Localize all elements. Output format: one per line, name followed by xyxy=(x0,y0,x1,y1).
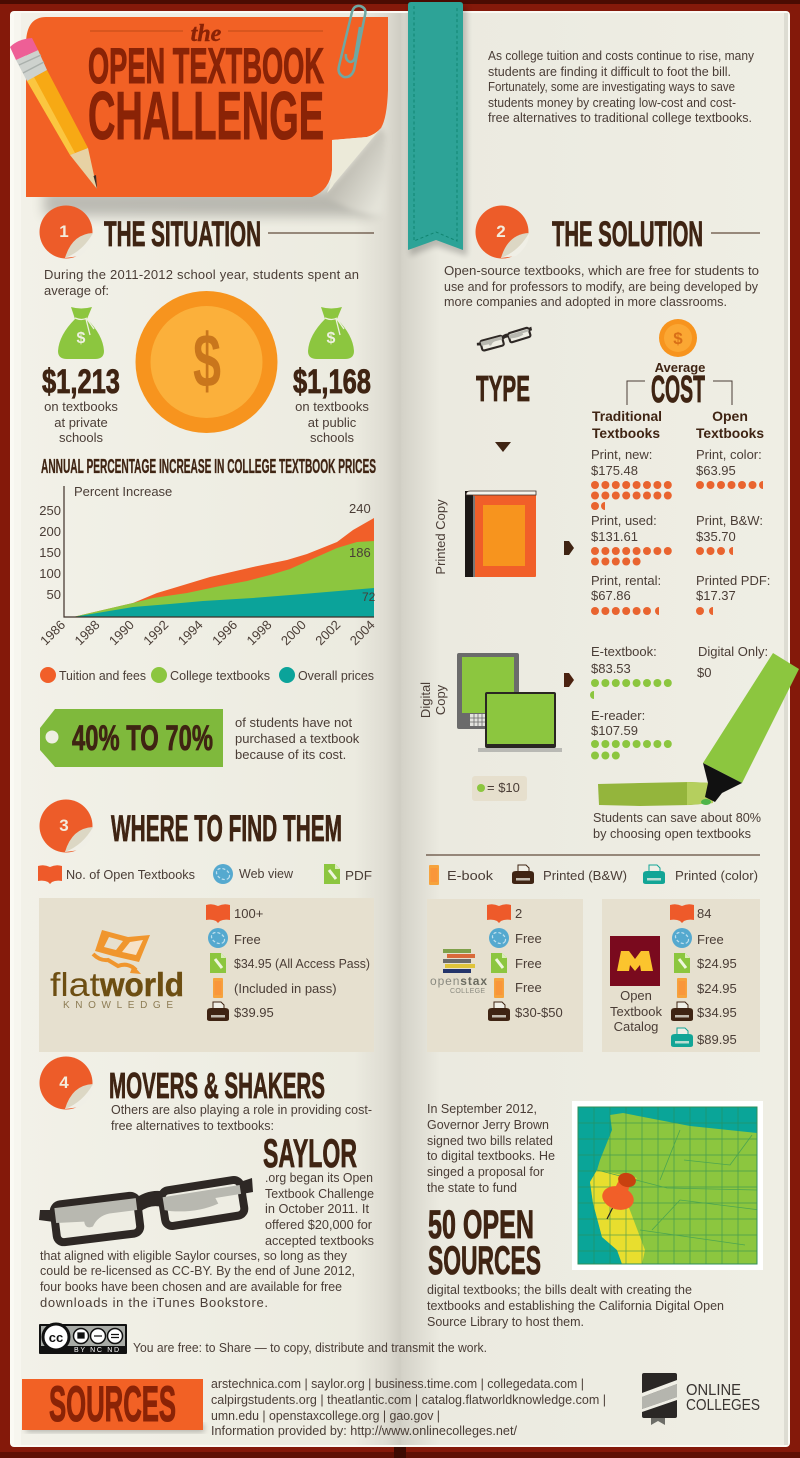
cost: print used: Print, used: xyxy=(591,513,657,528)
area chart: 186 xyxy=(349,545,371,560)
california bills text continued: textbooks and establishing the California Digital Open xyxy=(427,1298,724,1313)
heading: 50 open sources: 50 OPEN xyxy=(428,1203,534,1247)
california bills text continued: Source Library to host them. xyxy=(427,1314,584,1329)
panel: flat world knowledge: Free xyxy=(234,932,261,947)
saylor text xyxy=(40,1170,374,1310)
flat world logo: world xyxy=(99,966,184,1003)
dot legend xyxy=(472,776,527,801)
movers intro text xyxy=(111,1102,372,1133)
area chart: Percent Increase xyxy=(74,484,172,499)
dot legend: = $10 xyxy=(487,780,520,795)
callout text xyxy=(235,715,360,762)
panel: open textbook catalog: $24.95 xyxy=(697,981,737,996)
california bills text: to digital textbooks. He xyxy=(427,1148,555,1163)
openstax logo: COLLEGE xyxy=(450,988,485,995)
saylor text: four books have been chosen and are available for free xyxy=(40,1279,342,1294)
cost: digital only xyxy=(697,644,768,680)
online colleges logo: ONLINE xyxy=(686,1382,741,1399)
area chart: 200 xyxy=(39,524,61,539)
california bills text: Governor Jerry Brown xyxy=(427,1117,549,1132)
stat: private schools xyxy=(42,307,120,445)
icon: tablet and laptop xyxy=(457,653,562,752)
stat: public schools: schools xyxy=(310,430,355,445)
digital copy label: Copy xyxy=(433,684,448,715)
cost: print color xyxy=(696,447,763,489)
format key left xyxy=(38,864,372,884)
intro paragraph: Fortunately, some are investigating ways to save xyxy=(488,80,735,94)
saylor text: could be re-licensed as CC-BY. By the end of June 2012, xyxy=(40,1263,355,1278)
price tag callout: 40% TO 70% xyxy=(72,719,213,758)
panel: open textbook catalog: $34.95 xyxy=(697,1005,737,1020)
bookmark ribbon xyxy=(408,2,467,256)
cost: print used xyxy=(591,513,672,566)
flat world logo: KNOWLEDGE xyxy=(63,1000,173,1011)
panel: open textbook catalog: $24.95 xyxy=(697,956,737,971)
savings note: by choosing open textbooks xyxy=(593,826,751,841)
title text: CHALLENGE xyxy=(88,78,324,154)
sources banner: SOURCES xyxy=(49,1376,176,1432)
title text: OPEN TEXTBOOK xyxy=(88,38,324,94)
sources banner xyxy=(22,1376,204,1432)
area chart: 1986 xyxy=(37,617,68,648)
area chart: 1994 xyxy=(175,617,206,648)
section 1 heading: the situation: THE SITUATION xyxy=(104,215,261,254)
california bills text: In September 2012, xyxy=(427,1101,537,1116)
panel: open textbook catalog: Textbook xyxy=(610,1004,663,1019)
area chart: 150 xyxy=(39,545,61,560)
situation intro text xyxy=(44,267,359,298)
format key right: Printed (color) xyxy=(675,868,758,883)
panel: open textbook catalog: 84 xyxy=(697,906,711,921)
panel: open textbook catalog: Free xyxy=(697,932,724,947)
area chart: 1998 xyxy=(244,617,275,648)
california bills text continued xyxy=(427,1282,724,1329)
section 3 heading: where to find them: 3 xyxy=(59,816,69,835)
format key right: Printed (B&W) xyxy=(543,868,627,883)
cost heading: $ xyxy=(673,329,683,348)
movers intro text: Others are also playing a role in providing cost- xyxy=(111,1102,372,1117)
section 1 heading: the situation: 1 xyxy=(59,222,69,241)
section 3 heading: where to find them xyxy=(40,800,342,852)
icon: large glasses xyxy=(39,1178,253,1243)
saylor text: offered $20,000 for xyxy=(265,1217,373,1232)
solution intro text: more companies and adopted in more classrooms. xyxy=(444,294,727,309)
heading: 50 open sources xyxy=(428,1203,541,1283)
california bills text: the state to fund xyxy=(427,1180,517,1195)
saylor text: downloads in the iTunes Bookstore. xyxy=(40,1295,268,1310)
online colleges logo: COLLEGES xyxy=(686,1397,760,1414)
chart title: ANNUAL PERCENTAGE INCREASE IN COLLEGE TEXTBOOK PRICES xyxy=(41,456,376,478)
area chart: 100 xyxy=(39,566,61,581)
license text: You are free: to Share — to copy, distribute and transmit the work. xyxy=(133,1340,487,1355)
title text xyxy=(88,21,324,154)
intro paragraph: students money by creating low-cost and cost- xyxy=(488,96,736,110)
cost: printed pdf: Printed PDF: xyxy=(696,573,770,588)
cost heading: Average xyxy=(655,360,705,375)
section 2 heading: the solution: 2 xyxy=(496,222,506,241)
cost: e-textbook: $83.53 xyxy=(591,661,631,676)
california bills text xyxy=(427,1101,555,1195)
title text: the xyxy=(191,21,222,47)
arrow: down xyxy=(495,442,511,452)
printed copy label: Printed Copy xyxy=(433,499,448,575)
intro paragraph: As college tuition and costs continue to rise, many xyxy=(488,49,755,63)
cost heading: Open xyxy=(712,408,748,424)
intro paragraph: students are finding it difficult to foot the bill. xyxy=(488,65,731,79)
cost heading: Traditional xyxy=(592,408,662,424)
arrow: printed xyxy=(564,541,574,555)
cost: print new xyxy=(591,447,672,510)
solution intro text xyxy=(444,263,759,309)
map of california xyxy=(572,1101,763,1270)
cost: e-reader: $107.59 xyxy=(591,723,638,738)
section 4 heading: movers and shakers xyxy=(40,1056,325,1110)
stat: private schools: $1,213 xyxy=(42,363,120,401)
cost: print new: $175.48 xyxy=(591,463,638,478)
format key left: PDF xyxy=(345,868,372,883)
cost: e-reader xyxy=(591,708,672,760)
stat: private schools: schools xyxy=(59,430,104,445)
arrow: digital xyxy=(564,673,574,687)
area chart: 72 xyxy=(362,590,376,604)
area chart: 1996 xyxy=(209,617,240,648)
saylor text: in October 2011. It xyxy=(265,1201,369,1216)
cost: printed pdf: $17.37 xyxy=(696,588,736,603)
saylor text: accepted textbooks xyxy=(265,1233,374,1248)
icon: paperclip xyxy=(339,6,365,77)
area chart xyxy=(37,484,378,648)
cost: print b&w: $35.70 xyxy=(696,529,736,544)
price tag callout xyxy=(40,709,223,767)
cost: print rental xyxy=(591,573,661,615)
intro paragraph: free alternatives to traditional college textbooks. xyxy=(488,111,752,125)
california bills text: signed two bills related xyxy=(427,1133,553,1148)
sources list: arstechnica.com | saylor.org | business.time.com | collegedata.com | xyxy=(211,1376,584,1391)
saylor text: .org began its Open xyxy=(265,1170,373,1185)
saylor text: Textbook Challenge xyxy=(265,1186,374,1201)
type heading: TYPE xyxy=(476,368,530,409)
format key right: E-book xyxy=(447,868,494,883)
cost heading: Textbooks xyxy=(696,425,764,441)
online colleges logo xyxy=(642,1373,760,1425)
digital copy label: Digital xyxy=(418,682,433,718)
panel: flat world knowledge xyxy=(39,898,374,1052)
chart legend: Overall prices xyxy=(298,668,374,683)
cost: print color: $63.95 xyxy=(696,463,736,478)
chart legend: Tuition and fees xyxy=(59,668,146,683)
saylor text: that aligned with eligible Saylor courses, so long as they xyxy=(40,1248,347,1263)
chart legend xyxy=(40,667,374,683)
situation intro text: During the 2011-2012 school year, students spent an xyxy=(44,267,359,282)
flat world logo: flat xyxy=(50,966,100,1003)
panel: open textbook catalog: Catalog xyxy=(614,1019,658,1034)
panel: openstax college xyxy=(427,899,583,1052)
cost: digital only: Digital Only: xyxy=(698,644,768,659)
openstax logo xyxy=(430,949,487,995)
sources list: Information provided by: http://www.onlinecolleges.net/ xyxy=(211,1423,517,1438)
stat: public schools: on textbooks xyxy=(295,399,369,414)
chart legend: College textbooks xyxy=(170,668,270,683)
panel: openstax college: $30-$50 xyxy=(515,1005,563,1020)
cost: print b&w xyxy=(696,513,763,555)
cost heading: Textbooks xyxy=(592,425,660,441)
heading: 50 open sources: SOURCES xyxy=(428,1239,541,1283)
cost: e-textbook: E-textbook: xyxy=(591,644,657,659)
section 4 heading: movers and shakers: MOVERS & SHAKERS xyxy=(109,1065,325,1106)
openstax logo: openstax xyxy=(430,974,487,988)
panel: openstax college: 2 xyxy=(515,906,522,921)
stat: private schools: at private xyxy=(54,415,108,430)
cost: print rental: $67.86 xyxy=(591,588,631,603)
panel: openstax college: Free xyxy=(515,980,542,995)
panel: open textbook catalog xyxy=(602,899,760,1052)
cost: print color: Print, color: xyxy=(696,447,762,462)
cost: e-textbook xyxy=(590,644,672,699)
area chart: 1990 xyxy=(106,617,137,648)
savings note: Students can save about 80% xyxy=(593,810,761,825)
area chart: 2002 xyxy=(312,617,343,648)
cost: digital only: $0 xyxy=(697,665,711,680)
digital copy label xyxy=(418,682,448,718)
cost: e-reader: E-reader: xyxy=(591,708,645,723)
section 3 heading: where to find them: WHERE TO FIND THEM xyxy=(111,808,342,849)
cost: printed pdf xyxy=(696,573,770,615)
panel: openstax college: Free xyxy=(515,931,542,946)
section 1 heading: the situation xyxy=(40,206,374,258)
title banner xyxy=(26,17,388,216)
solution intro text: use and for professors to modify, are being developed by xyxy=(444,279,758,294)
flat world logo xyxy=(50,930,184,1011)
cost heading: COST xyxy=(651,369,705,411)
area chart: 50 xyxy=(47,587,61,602)
university of minnesota logo xyxy=(610,936,660,986)
icon: printed book xyxy=(465,491,536,577)
section 4 heading: movers and shakers: 4 xyxy=(59,1073,69,1092)
cost: print used: $131.61 xyxy=(591,529,638,544)
savings note xyxy=(593,810,761,841)
creative commons badge xyxy=(39,1324,127,1354)
creative commons badge: BY NC ND xyxy=(74,1347,119,1354)
panel: flat world knowledge: $34.95 (All Access Pass) xyxy=(234,956,370,971)
panel: flat world knowledge: 100+ xyxy=(234,906,263,921)
panel: openstax college: Free xyxy=(515,956,542,971)
map pin xyxy=(600,1171,638,1219)
area chart: 2004 xyxy=(347,617,378,648)
cost: print b&w: Print, B&W: xyxy=(696,513,763,528)
callout text: of students have not xyxy=(235,715,352,730)
stat: public schools: $1,168 xyxy=(293,363,371,401)
callout text: because of its cost. xyxy=(235,747,346,762)
intro paragraph xyxy=(488,49,755,125)
format key right xyxy=(429,865,758,885)
saylor heading: SAYLOR xyxy=(263,1132,357,1176)
stat: public schools xyxy=(293,307,371,445)
cost: print new: Print, new: xyxy=(591,447,652,462)
creative commons badge: cc xyxy=(49,1330,63,1345)
icon: small glasses xyxy=(475,327,534,352)
format key left: Web view xyxy=(239,866,294,881)
icon: large dollar coin: $ xyxy=(193,319,221,404)
icon: pencil xyxy=(10,38,97,189)
panel: open textbook catalog: Open xyxy=(620,988,652,1003)
callout text: purchased a textbook xyxy=(235,731,360,746)
icon: highlighter xyxy=(598,653,799,806)
california bills text: singed a proposal for xyxy=(427,1164,545,1179)
california bills text continued: digital textbooks; the bills dealt with creating the xyxy=(427,1282,692,1297)
area chart: 2000 xyxy=(278,617,309,648)
cost: print rental: Print, rental: xyxy=(591,573,661,588)
sources list: umn.edu | openstaxcollege.org | gao.gov | xyxy=(211,1408,440,1423)
situation intro text: average of: xyxy=(44,283,109,298)
stat: public schools: at public xyxy=(308,415,357,430)
format key left: No. of Open Textbooks xyxy=(66,867,195,882)
sources list xyxy=(211,1376,606,1438)
solution intro text: Open-source textbooks, which are free for students to xyxy=(444,263,759,278)
panel: flat world knowledge: (Included in pass) xyxy=(234,981,337,996)
panel: flat world knowledge: $39.95 xyxy=(234,1005,274,1020)
area chart: 250 xyxy=(39,503,61,518)
movers intro text: free alternatives to textbooks: xyxy=(111,1118,274,1133)
cost heading xyxy=(592,319,764,441)
area chart: 1992 xyxy=(140,617,171,648)
icon: large dollar coin xyxy=(136,291,278,433)
sources list: calpirgstudents.org | theatlantic.com | catalog.flatworldknowledge.com | xyxy=(211,1392,606,1407)
stat: private schools: on textbooks xyxy=(44,399,118,414)
panel: open textbook catalog: $89.95 xyxy=(697,1032,737,1047)
section 2 heading: the solution xyxy=(476,206,760,258)
area chart: 240 xyxy=(349,501,371,516)
area chart: 1988 xyxy=(72,617,103,648)
